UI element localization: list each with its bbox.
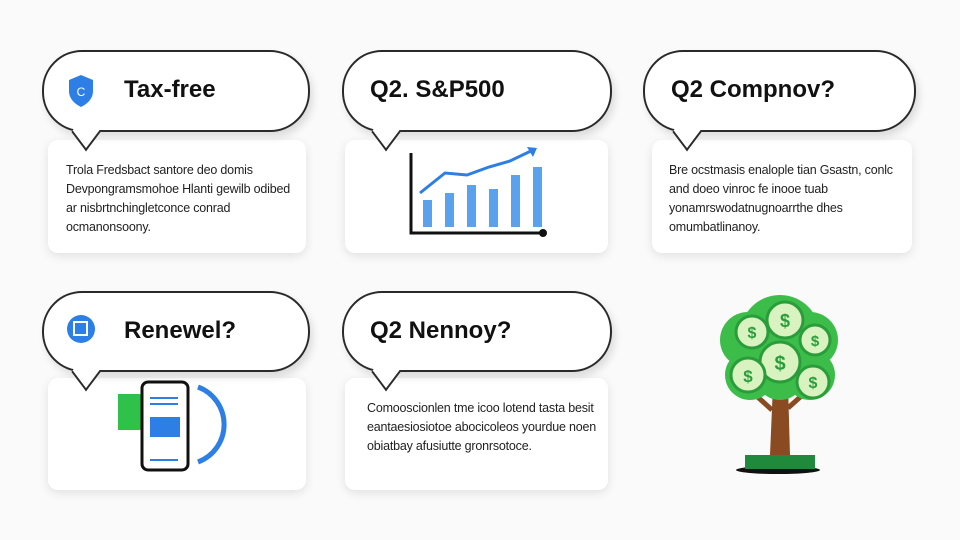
illustration: money tree: $ bbox=[811, 333, 820, 350]
bubble: Q2 Nennoy: Q2 Nennoy? bbox=[370, 317, 511, 344]
icon: shield bbox=[69, 75, 93, 107]
card: S&P500 chart bbox=[345, 140, 608, 253]
icon: blue circle bbox=[67, 315, 95, 343]
card: tax-free text bbox=[48, 140, 306, 253]
card: nennoy text: Comooscionlen tme icoo lotend tasta besit eantaesiosiotoe abocicoleos yourdue noen obiatbay afusiutte gronrsotoce. bbox=[367, 401, 596, 453]
bubble: Tax-free: Tax-free bbox=[124, 76, 216, 103]
bubble: Renewel: Renewel? bbox=[124, 317, 236, 344]
card: compnov text bbox=[652, 140, 912, 253]
card: compnov text: Bre ocstmasis enalople tian Gsastn, conlc and doeo vinroc fe inooe tuab yonamrswodatnugnoarrthe dhes omumbatlinanoy. bbox=[669, 163, 893, 234]
icon: phone renewal bbox=[118, 380, 227, 472]
illustration: money tree: $ bbox=[809, 375, 818, 392]
bubble: Q2 S&P500 bbox=[342, 50, 612, 132]
bubble: Q2 S&P500: Q2. S&P500 bbox=[370, 76, 505, 103]
illustration: money tree: $ bbox=[780, 311, 790, 331]
illustration: money tree: $ bbox=[743, 367, 753, 386]
bubble: Tax-free bbox=[42, 50, 310, 132]
card: renewal phone bbox=[48, 378, 306, 490]
illustration: money tree: $ bbox=[774, 353, 786, 375]
chart: bar and line bbox=[410, 147, 547, 237]
card: nennoy text bbox=[345, 378, 608, 490]
card: tax-free text: Trola Fredsbact santore deo domis Devpongramsmohoe Hlanti gewilb odibed ar nisbrtnchingletconce conrad ocmanonsoony. bbox=[66, 163, 290, 234]
bubble: Q2 Nennoy bbox=[342, 291, 612, 372]
illustration: money tree bbox=[720, 295, 838, 474]
icon: shield: C bbox=[77, 85, 86, 99]
bubble: Renewel bbox=[42, 291, 310, 372]
illustration: money tree: $ bbox=[748, 325, 757, 342]
bubble: Q2 Compnov: Q2 Compnov? bbox=[671, 76, 835, 103]
bubble: Q2 Compnov bbox=[643, 50, 916, 132]
